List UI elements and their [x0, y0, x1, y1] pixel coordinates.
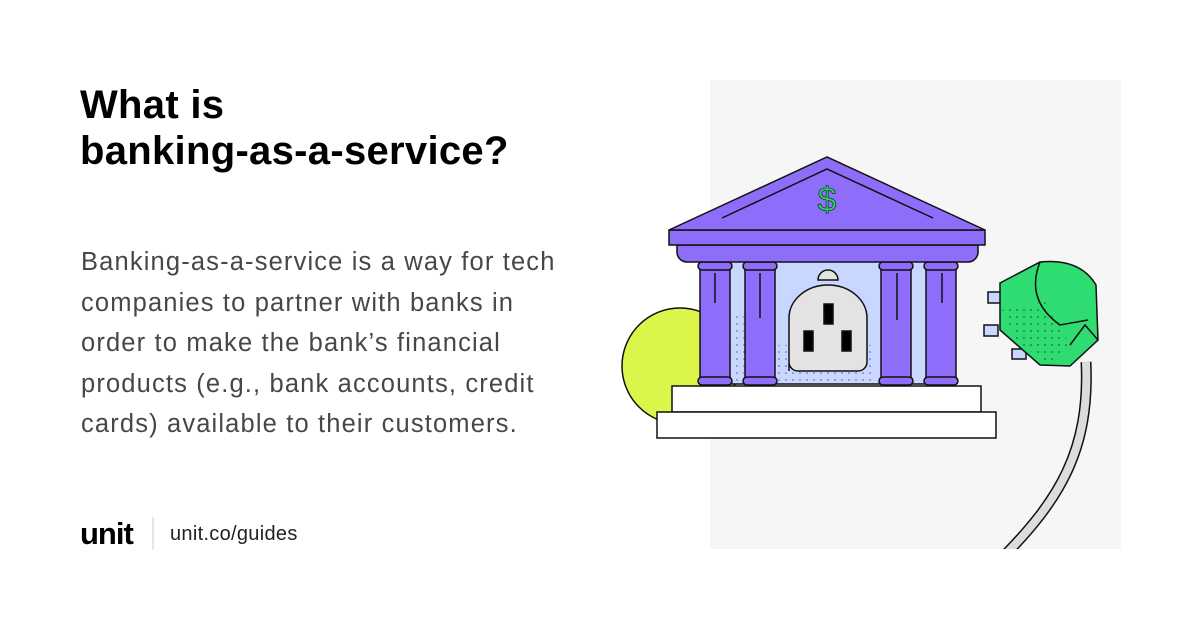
- bank building: [657, 157, 996, 438]
- background panel: [710, 80, 1121, 549]
- body text: companies to partner with banks in: [81, 289, 514, 317]
- body text: Banking-as-a-service is a way for tech: [81, 248, 556, 276]
- body text: order to make the bank’s financial: [81, 329, 501, 357]
- outlet: [789, 270, 867, 371]
- title: banking-as-a-service?: [80, 129, 509, 173]
- body text: cards) available to their customers.: [81, 410, 518, 438]
- title: What is: [80, 83, 224, 127]
- url: unit.co/guides: [170, 523, 298, 545]
- steps: [672, 386, 981, 412]
- title: [80, 83, 509, 173]
- columns: [698, 262, 958, 385]
- body text: [81, 248, 556, 438]
- illustration: [621, 80, 1121, 549]
- logo: unit: unit: [80, 516, 133, 551]
- dollar sign: $: [818, 181, 837, 219]
- plug with cable: [984, 261, 1098, 560]
- body text: products (e.g., bank accounts, credit: [81, 370, 535, 398]
- footer: [80, 516, 298, 551]
- yellow circle: [622, 308, 738, 424]
